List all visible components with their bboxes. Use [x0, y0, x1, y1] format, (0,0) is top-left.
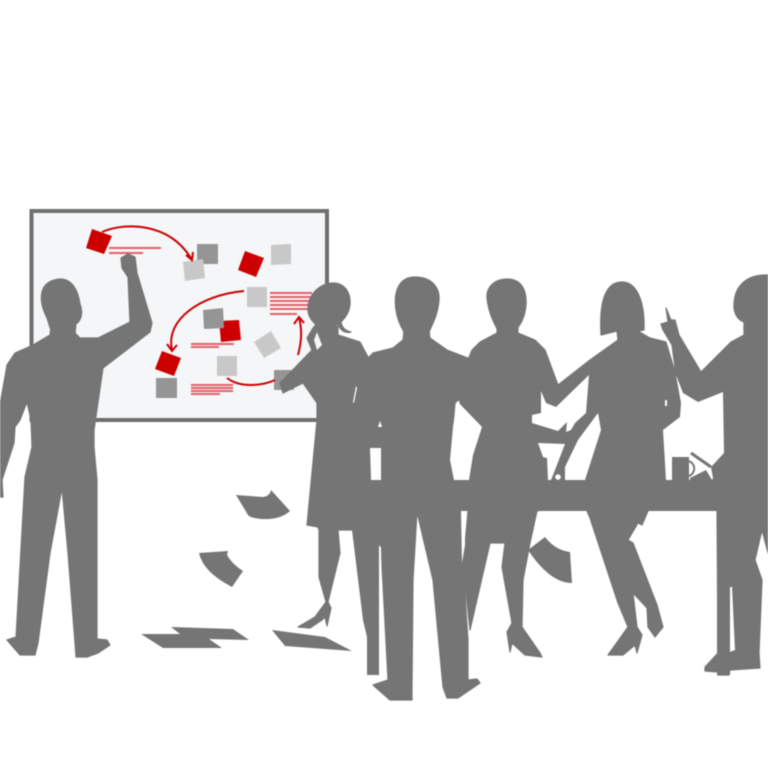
woman in centre silhouette — [460, 279, 600, 657]
red curved arrows — [102, 226, 304, 385]
man in centre silhouette — [352, 277, 480, 700]
woman with bob haircut silhouette — [565, 282, 681, 655]
woman with phone silhouette — [280, 283, 372, 628]
man pointing silhouette — [661, 275, 768, 675]
dark grey sticky notes — [156, 244, 294, 398]
whiteboard — [32, 211, 327, 420]
red note text lines — [109, 248, 312, 394]
red sticky notes — [86, 229, 264, 376]
man at whiteboard silhouette — [0, 254, 152, 657]
gap between hand and neck — [314, 332, 322, 350]
table with legs — [352, 480, 768, 675]
scattered papers — [141, 490, 572, 651]
light grey sticky notes — [183, 244, 291, 376]
white gaps between figures — [353, 375, 735, 673]
coffee mug and spoon on table — [672, 453, 712, 481]
